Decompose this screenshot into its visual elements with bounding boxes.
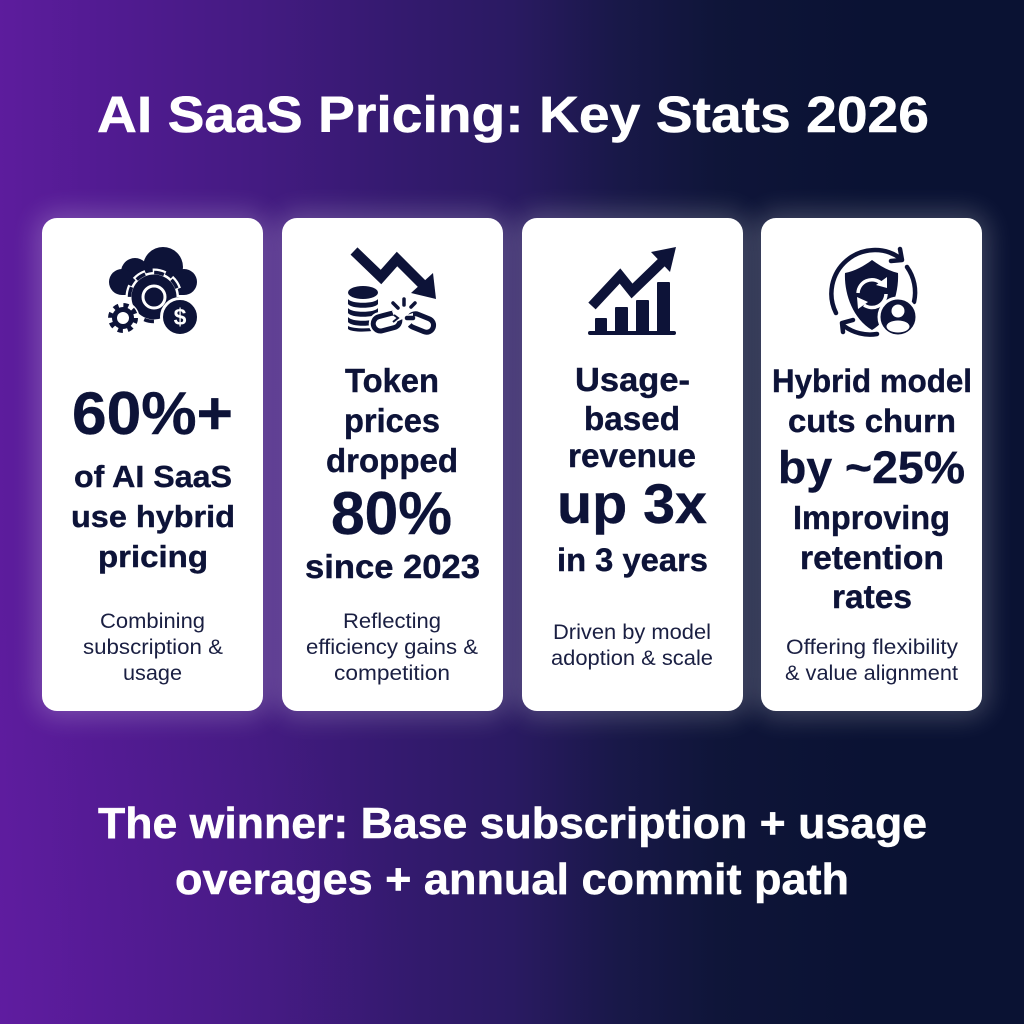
stat: card 3 text: in 3 years (557, 542, 708, 578)
stat: card 1 text: Combining (100, 610, 205, 633)
stat: card 1 text: pricing (98, 539, 208, 574)
stat: card 1 text: 60%+ (72, 380, 233, 447)
stat: card 2 text: prices (344, 402, 440, 439)
stat: card 4 text (772, 363, 972, 685)
icon: cloud, gears and dollar: $ (174, 304, 187, 330)
stat: card 1 text: of AI SaaS (74, 459, 232, 494)
panel: card 2 (282, 218, 503, 711)
stat: card 3 text: up 3x (557, 472, 707, 535)
conclusion: overages + annual commit path (175, 855, 849, 904)
stat: card 1 text (71, 380, 235, 685)
stat: card 4 text: by ~25% (778, 442, 965, 493)
stat: card 3 text: adoption & scale (551, 647, 713, 670)
stat: card 2 text (305, 362, 480, 685)
stat: card 2 text: Reflecting (343, 610, 441, 633)
conclusion (98, 799, 927, 904)
stat: card 4 text: Offering flexibility (786, 636, 959, 659)
conclusion: The winner: Base subscription + usage (98, 799, 927, 848)
stat: card 2 text: dropped (326, 442, 458, 479)
stat: card 2 text: Token (345, 362, 439, 399)
stat: card 4 text: retention (800, 539, 944, 576)
icon: falling arrow, coins and broken chain (348, 251, 436, 334)
stat: card 1 text: usage (123, 662, 182, 685)
stat: card 3 text: revenue (568, 437, 696, 474)
panel: card 1 (42, 218, 263, 711)
stat: card 4 text: cuts churn (788, 403, 956, 439)
panel: card 3 (522, 218, 743, 711)
panel: card 4 (761, 218, 982, 711)
stat: card 2 text: competition (334, 662, 450, 685)
stat: card 2 text: efficiency gains & (306, 636, 478, 659)
stat: card 3 text (551, 361, 713, 670)
stat: card 4 text: Hybrid model (772, 363, 972, 399)
stat: card 1 text: use hybrid (71, 499, 235, 534)
stat: card 3 text: based (584, 400, 680, 437)
icon: rising arrow and bars (588, 247, 676, 335)
stat: card 2 text: 80% (331, 480, 452, 547)
stat: card 4 text: & value alignment (785, 662, 958, 685)
stat: card 3 text: Driven by model (553, 621, 711, 644)
icon: shield, renewal arrows and user (831, 249, 917, 336)
stat: card 3 text: Usage- (575, 361, 690, 398)
stat: card 4 text: rates (832, 578, 912, 615)
icon: cloud, gears and dollar (106, 247, 198, 336)
stat: card 1 text: subscription & (83, 636, 223, 659)
stat: card 4 text: Improving (793, 499, 950, 536)
title: AI SaaS Pricing: Key Stats 2026 (97, 86, 929, 143)
stat: card 2 text: since 2023 (305, 548, 480, 585)
